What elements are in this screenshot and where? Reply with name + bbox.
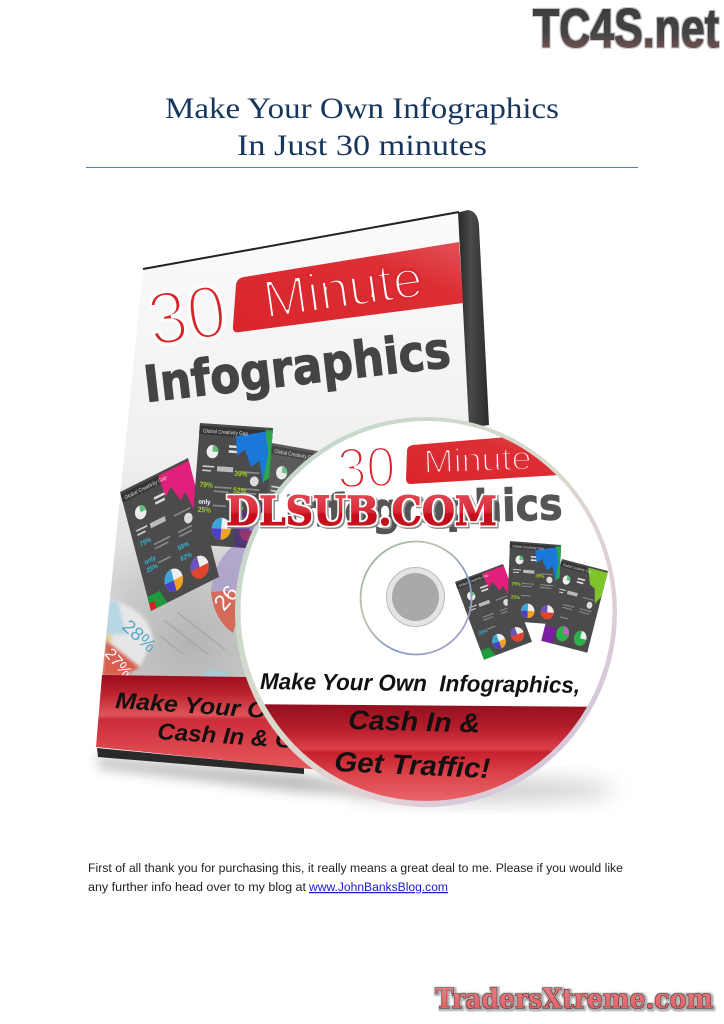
title [165, 92, 559, 162]
disc heading 'Infographics': Infographics [284, 479, 563, 538]
title divider [86, 167, 638, 168]
disc sheet: right: Global Creativity Gap [562, 563, 592, 574]
mini infographic: left sheet: 59% [177, 540, 190, 553]
mini infographic: left sheet: Global Creativity Gap [124, 475, 168, 502]
cover red banner 'Minute': Minute [259, 249, 426, 330]
disc red banner 'Minute': Minute [423, 439, 532, 480]
box front cover [102, 212, 482, 690]
disc label surface [240, 421, 612, 801]
intro paragraph [88, 861, 623, 894]
mini infographic: left sheet: 62% [180, 551, 193, 564]
mini infographic: centre sheet: only [198, 498, 211, 507]
disc hub ring [360, 542, 472, 654]
disc rim [235, 417, 617, 807]
watermark: DLSUB.COM: DLSUB.COM [226, 488, 497, 535]
disc band text: Get Traffic! [334, 746, 491, 784]
mini infographic: left sheet [120, 458, 219, 611]
cover red banner 'Minute' [233, 242, 463, 332]
product box [65, 210, 489, 795]
disc sheet: left: Global Creativity Gap [458, 573, 489, 588]
box spine [456, 210, 489, 428]
disc red banner 'Minute' [406, 437, 560, 484]
mini infographic: centre sheet: 39% [234, 469, 248, 479]
band text [115, 687, 317, 755]
disc sheet: left [455, 564, 532, 660]
mini infographic: centre sheet: 25% [197, 506, 212, 515]
disc shadow [345, 778, 615, 802]
faded pie charts behind [102, 546, 246, 677]
faded pie charts behind: 27% [101, 646, 135, 681]
disc sheet: centre: 39% [535, 573, 545, 580]
faded pie charts behind: 26 [209, 580, 244, 615]
intro paragraph: any further info head over to my blog at [88, 880, 307, 894]
title: In Just 30 minutes [237, 129, 487, 162]
mini infographic: centre sheet: 52% [233, 486, 247, 496]
disc artwork [260, 438, 608, 801]
disc sheet: centre: 25% [511, 594, 521, 601]
disc tagline: Make Your Own Infographics, [260, 668, 580, 698]
disc red band [264, 704, 588, 801]
disc sheet: left: 25% [478, 628, 489, 637]
disc mini sheets [455, 541, 608, 660]
cover heading 'Infographics': Infographics [141, 321, 453, 414]
mini infographic: centre sheet [191, 423, 273, 549]
mini infographic: third sheet: Global Creativity Gap [274, 448, 317, 462]
disc sheet: right [541, 559, 608, 653]
disc sheet: centre [507, 541, 561, 625]
CD disc [225, 417, 625, 815]
mini infographic: centre sheet: 62% [229, 513, 244, 522]
faded pie charts behind: 28% [118, 616, 160, 657]
intro paragraph: First of all thank you for purchasing this, it really means a great deal to me. Please if you would like [88, 861, 623, 875]
mini infographic: centre sheet: Global Creativity Gap [203, 428, 248, 438]
disc '30': 30 [336, 435, 396, 501]
box top edge [143, 212, 459, 269]
band text: Make Your Own [115, 687, 302, 725]
mini infographic: left sheet: only [144, 554, 157, 567]
mini infographic: third sheet [255, 443, 340, 575]
box shadow [96, 757, 400, 795]
disc centre hole [386, 568, 444, 626]
bottom red band [96, 675, 320, 774]
mini infographic: left sheet: 79% [139, 536, 152, 549]
disc sheet: centre: Global Creativity Gap [512, 544, 544, 551]
mini infographic: left sheet: 25% [146, 562, 159, 575]
mini infographic: centre sheet: 59% [230, 503, 244, 512]
disc band text: Cash In & [348, 705, 481, 738]
title: Make Your Own Infographics [165, 92, 559, 125]
disc band text [336, 710, 490, 778]
mini infographic: centre sheet: 79% [199, 480, 214, 490]
band text: Cash In & Get [157, 718, 317, 755]
blog link: www.JohnBanksBlog.com [308, 880, 448, 894]
cover '30': 30 [143, 268, 231, 362]
disc sheet: centre: 79% [511, 581, 521, 588]
